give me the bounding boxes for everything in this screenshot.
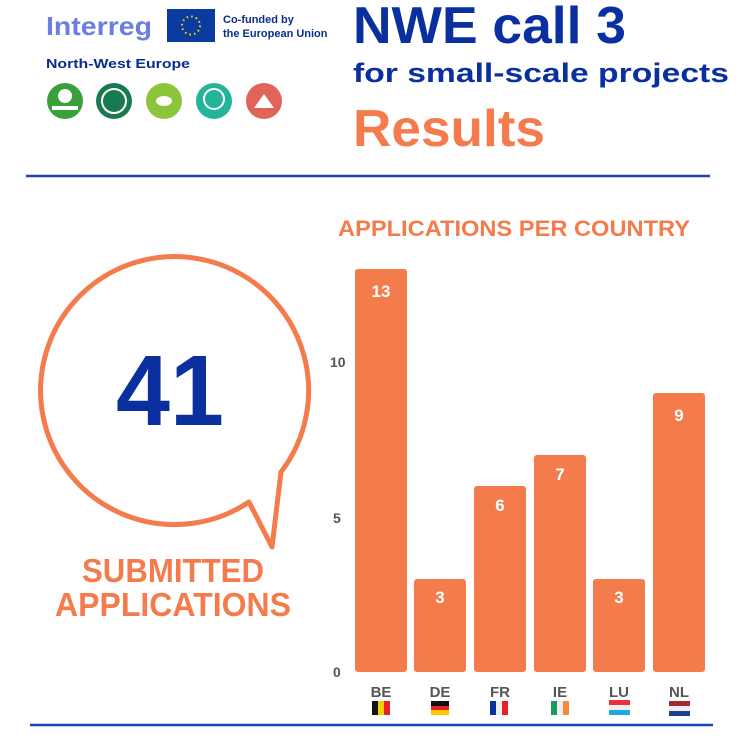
y axis labels: 5 (333, 510, 341, 526)
speech bubble with total (41, 257, 309, 547)
label: submitted applications (55, 552, 291, 623)
speech bubble with total: 41 (116, 335, 224, 447)
flags (372, 700, 690, 716)
icons: priority circles (47, 83, 282, 119)
y axis labels: 10 (330, 354, 346, 370)
country labels: DE (430, 684, 450, 701)
logo: Interreg: the European Union (223, 28, 328, 40)
y axis labels: 0 (333, 664, 341, 680)
bar chart: 6 (495, 496, 505, 515)
label: submitted applications: SUBMITTED (82, 552, 264, 589)
title (353, 0, 729, 158)
bar chart: 7 (555, 465, 565, 484)
label: submitted applications: APPLICATIONS (55, 586, 291, 623)
country labels: FR (490, 684, 510, 701)
country labels (371, 684, 689, 701)
country labels: BE (371, 684, 391, 701)
y axis labels (330, 354, 346, 680)
bar chart: 3 (435, 588, 445, 607)
chart heading: APPLICATIONS PER COUNTRY (338, 216, 690, 241)
icon: EU flag (167, 9, 215, 42)
logo: Interreg: North-West Europe (46, 56, 190, 71)
country labels: LU (609, 684, 629, 701)
bar chart (355, 269, 705, 672)
logo: Interreg: Co-funded by (223, 14, 295, 26)
logo: Interreg (46, 9, 328, 71)
title: for small-scale projects (353, 58, 729, 88)
title: Results (353, 100, 545, 158)
bar chart: 3 (614, 588, 624, 607)
country labels: NL (669, 684, 689, 701)
logo: Interreg: Interreg (46, 11, 152, 41)
bar chart: 9 (674, 406, 684, 425)
country labels: IE (553, 684, 567, 701)
bar chart: 13 (372, 282, 390, 301)
